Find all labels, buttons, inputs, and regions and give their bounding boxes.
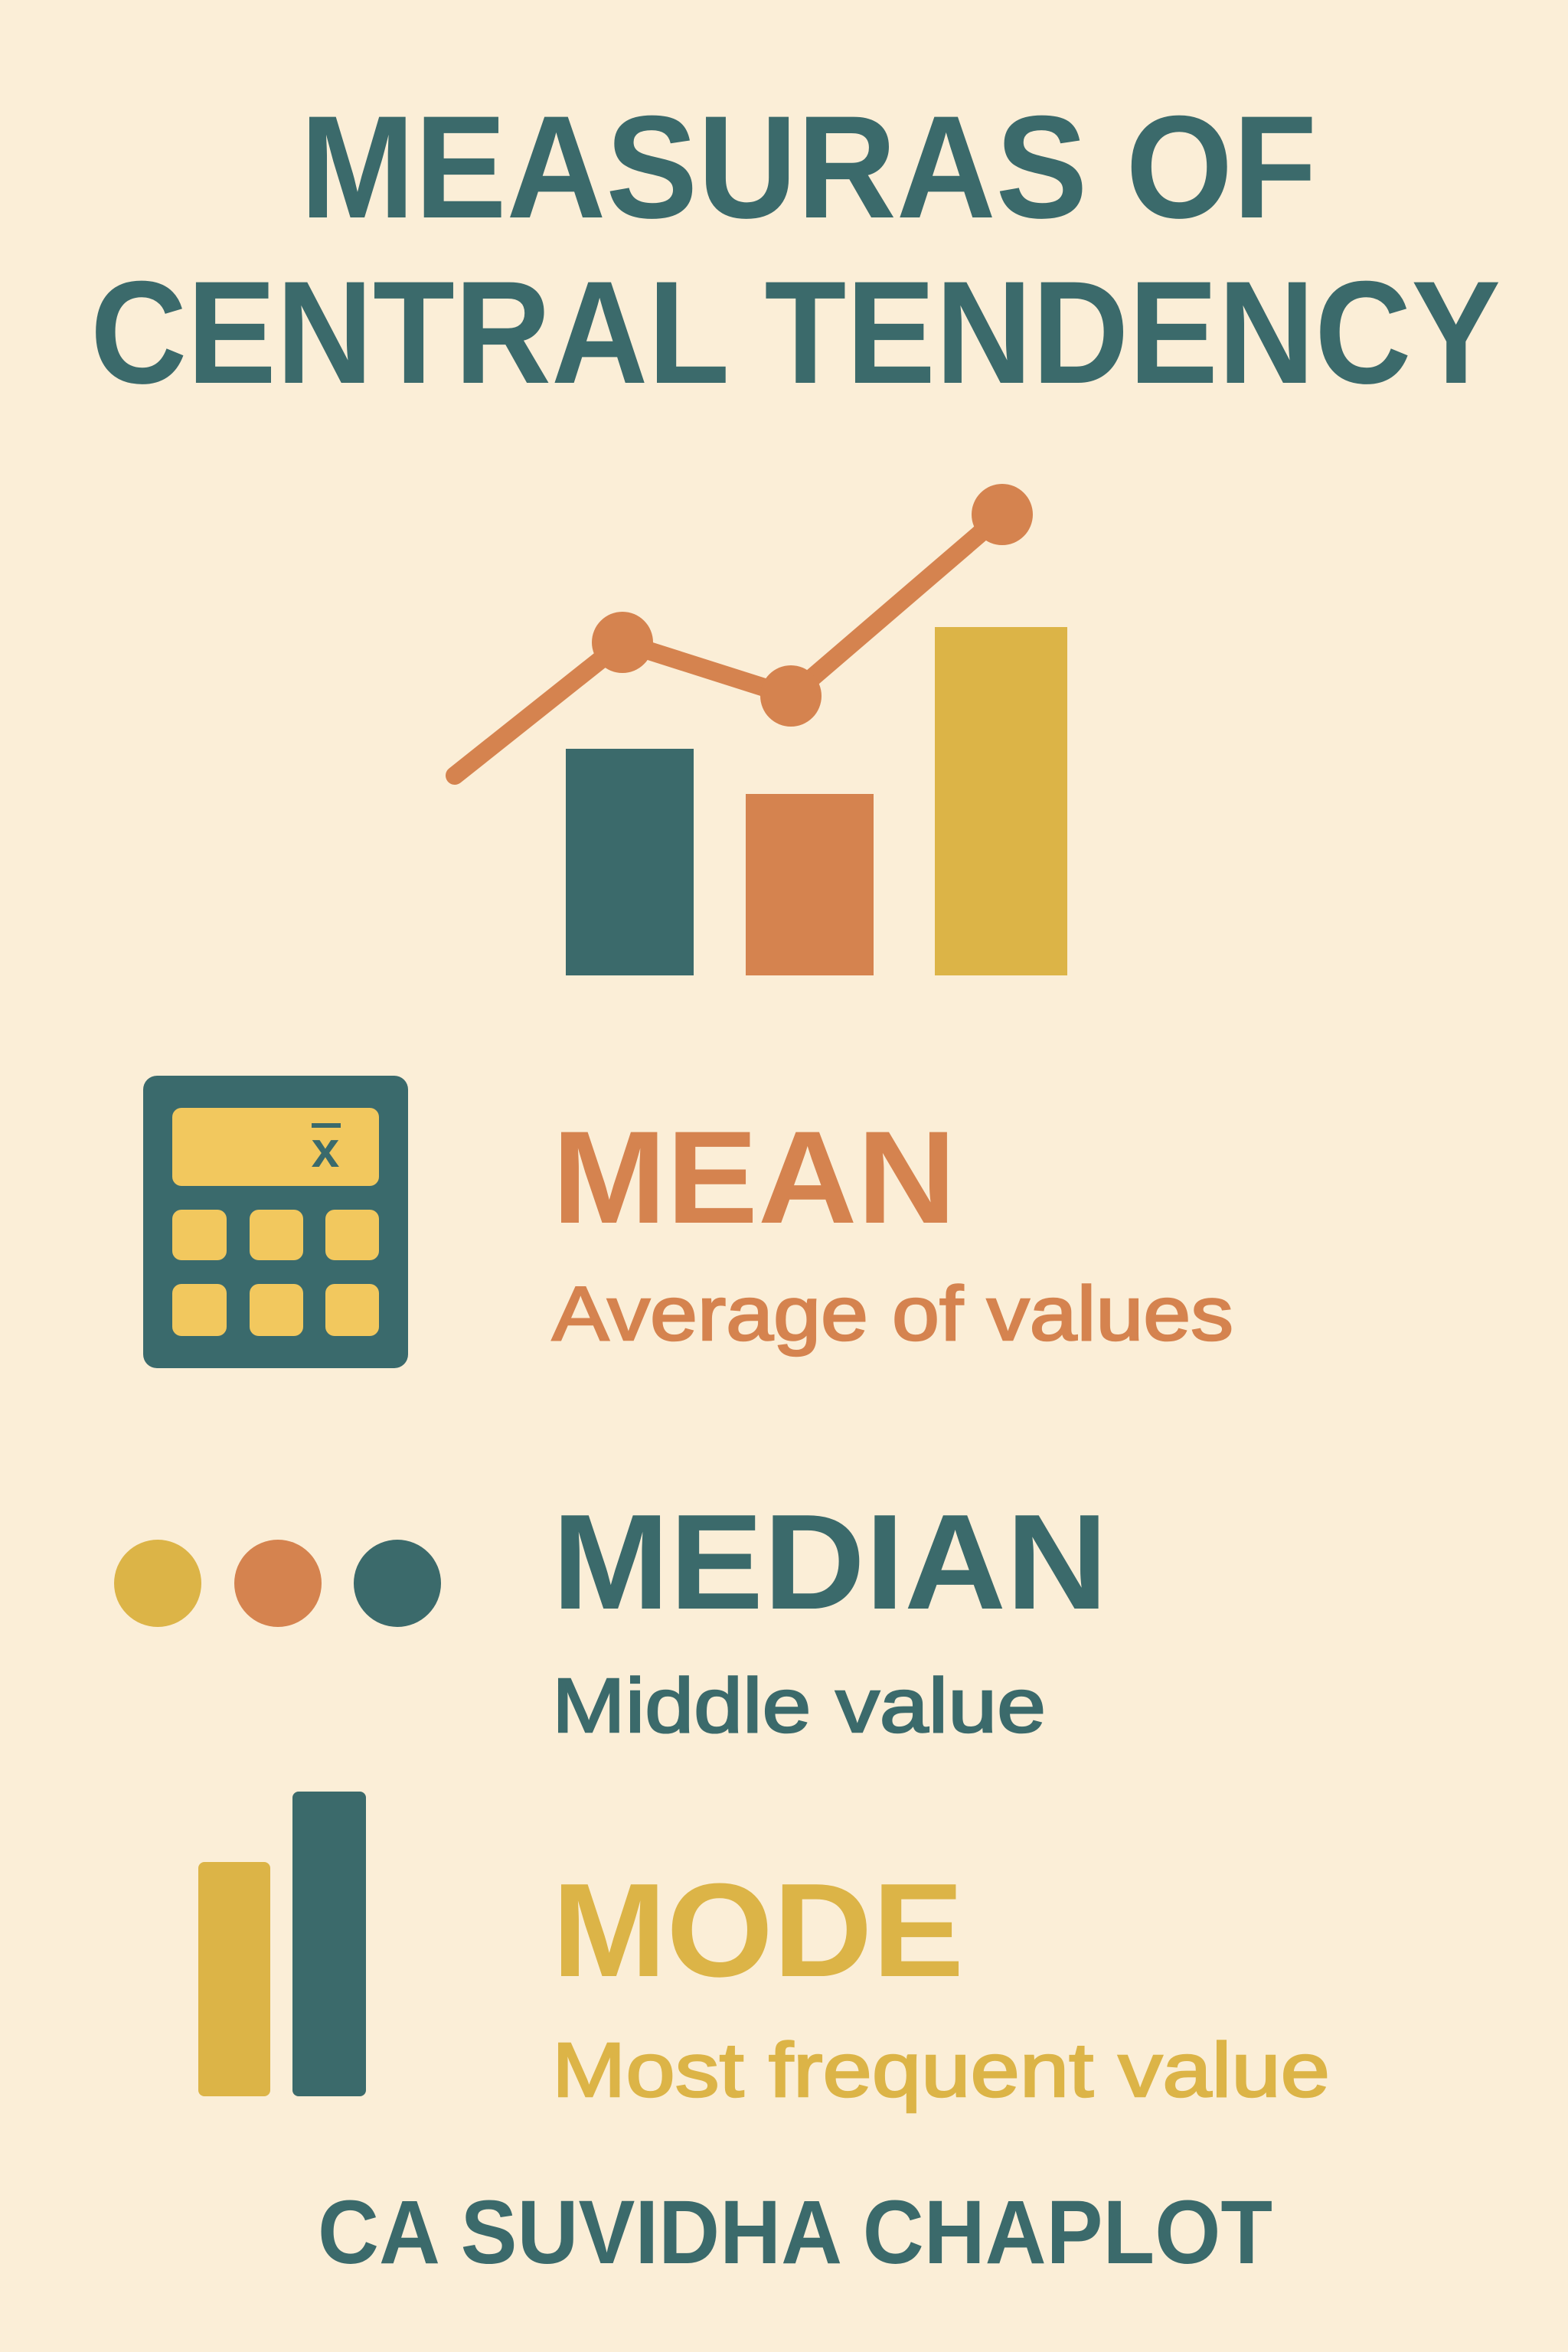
title: MEASURAS OF — [300, 86, 1317, 249]
median description: Middle value — [552, 1663, 1046, 1749]
mean heading: MEAN — [552, 1104, 956, 1251]
icon: calculator: x — [312, 1121, 340, 1178]
title — [90, 86, 1501, 414]
mode description: Most frequent value — [552, 2027, 1330, 2113]
icon: mode bars — [198, 1792, 366, 2096]
chart: bars with trend line — [455, 484, 1067, 975]
median heading: MEDIAN — [552, 1486, 1108, 1638]
mode heading: MODE — [552, 1855, 964, 2004]
icon: three dots — [114, 1540, 441, 1627]
mean description: Average of values — [552, 1271, 1233, 1357]
footer author: CA SUVIDHA CHAPLOT — [318, 2182, 1272, 2283]
icon: calculator — [143, 1076, 408, 1368]
